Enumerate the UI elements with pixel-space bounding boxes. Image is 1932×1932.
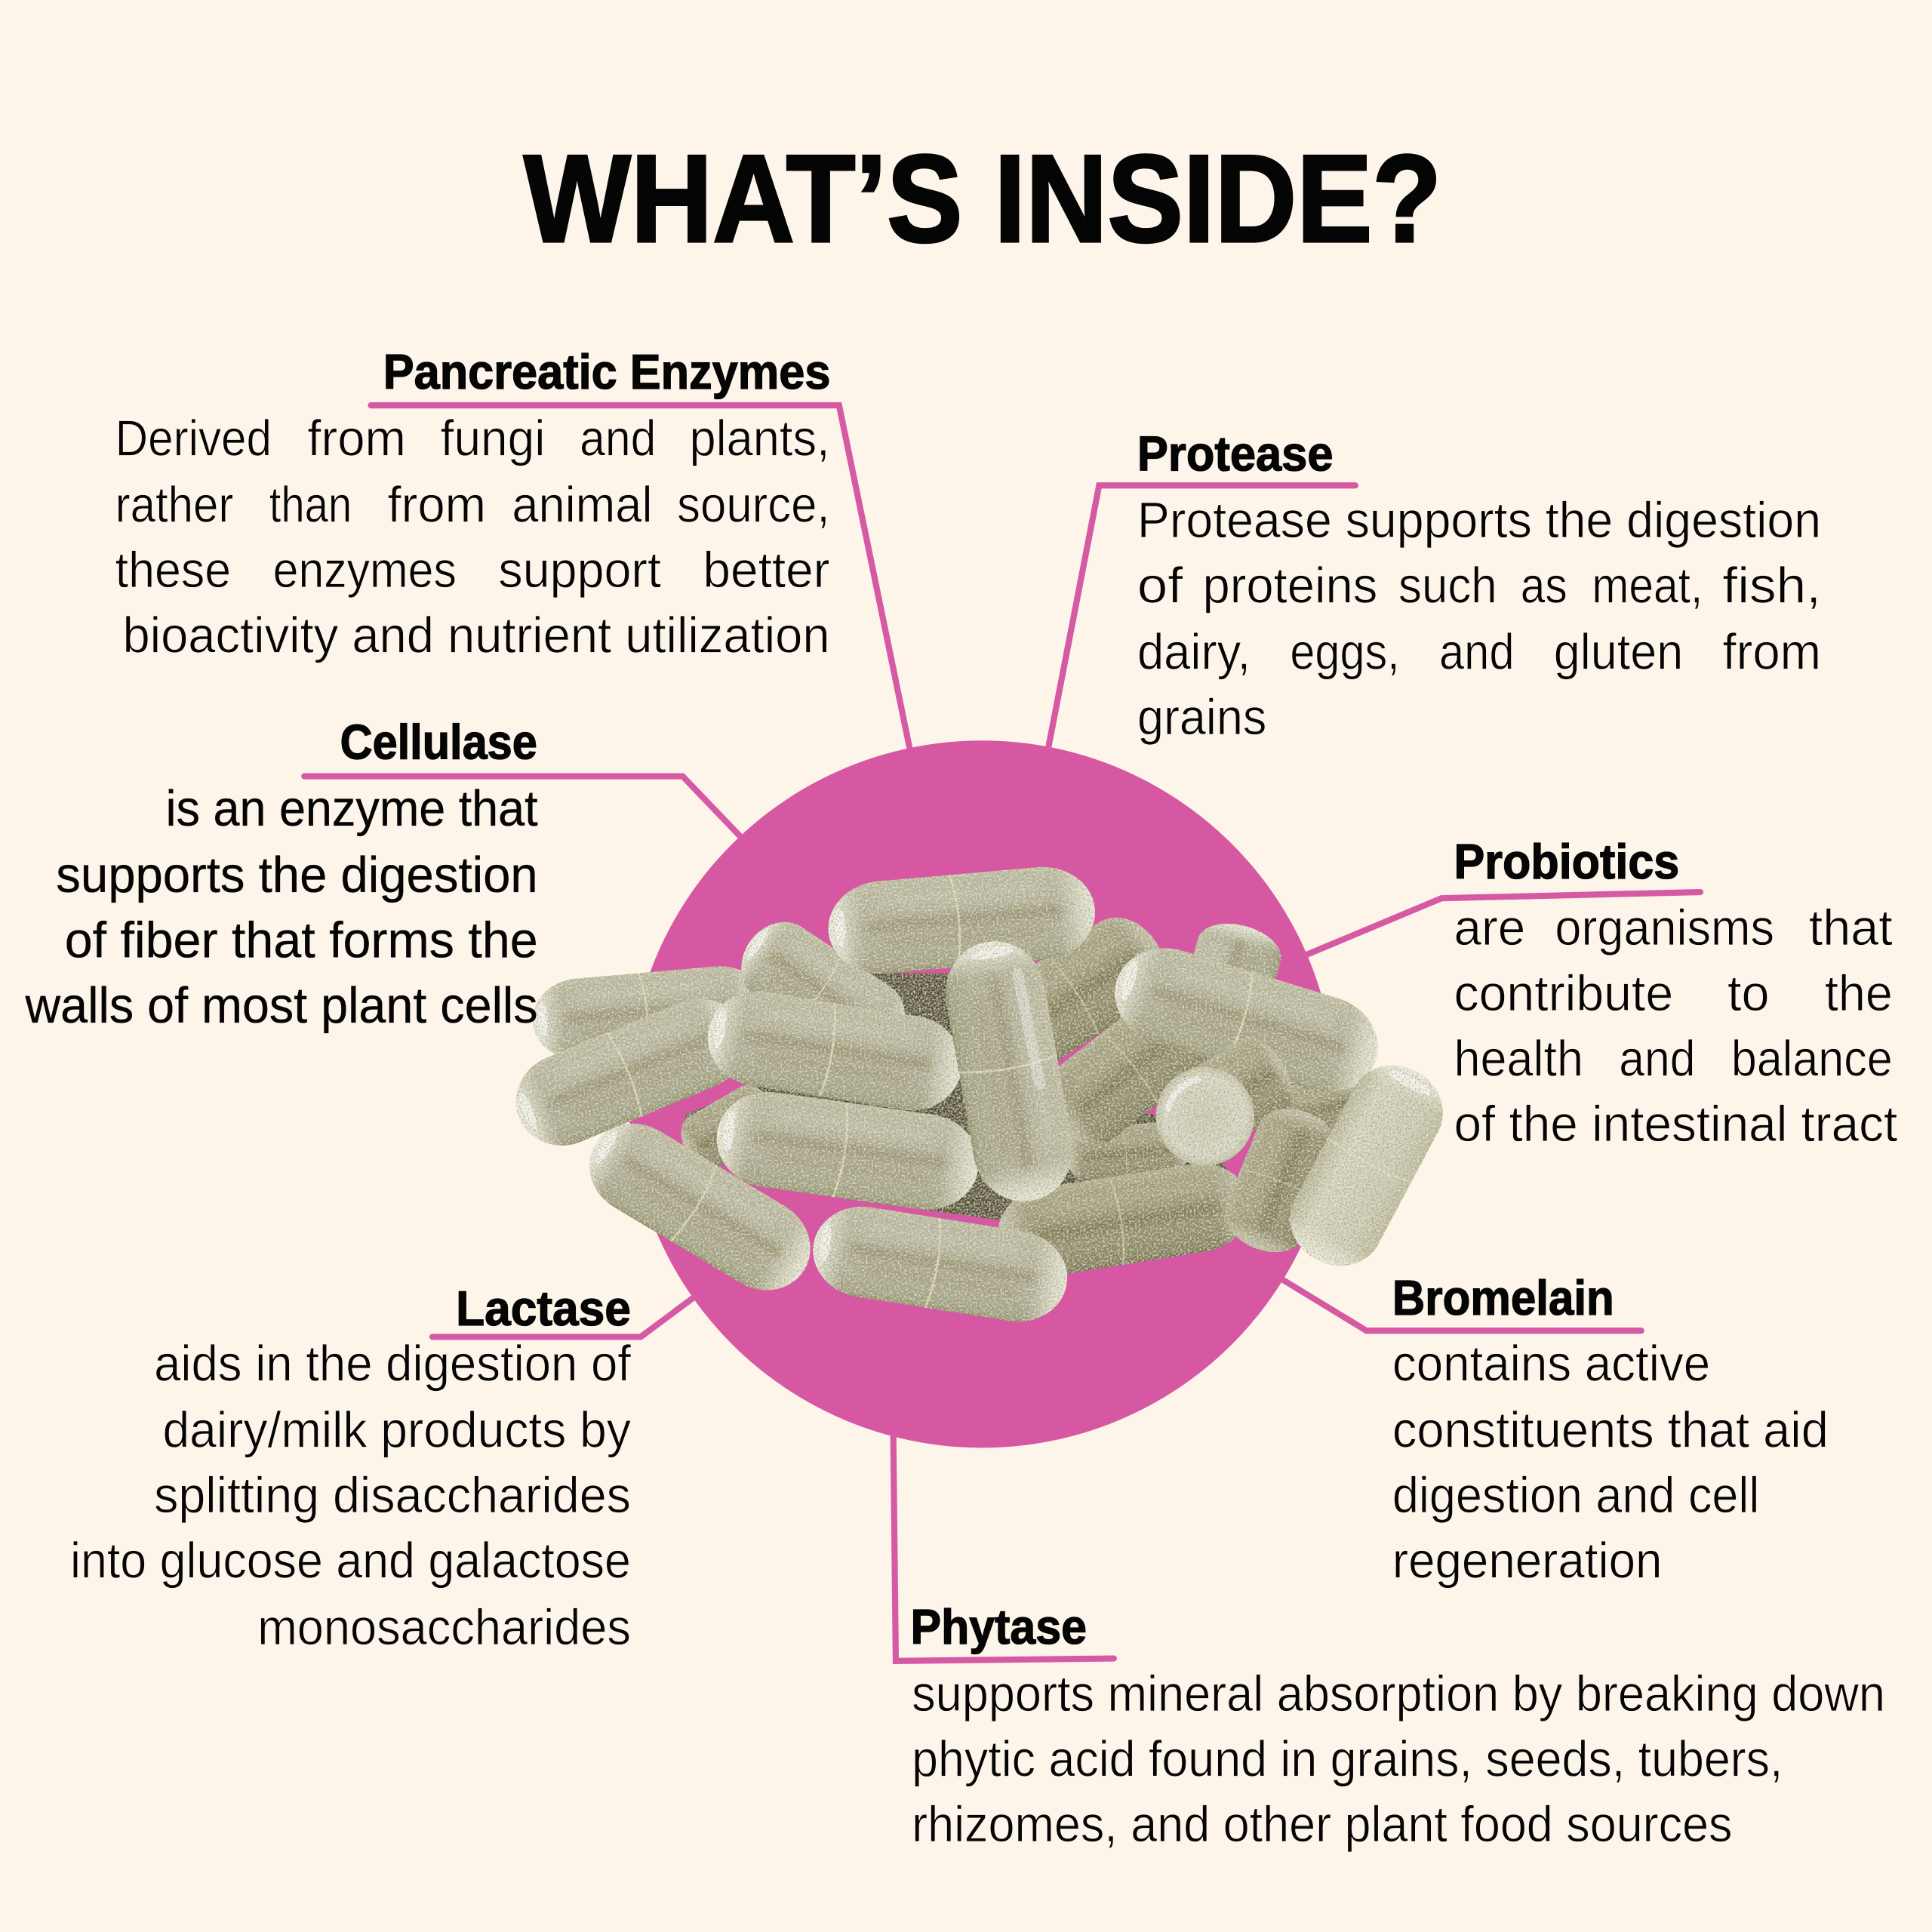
- text block: Bromelain description: digestion and cell: [1392, 1467, 1759, 1524]
- text block: Protease description: proteins: [1202, 557, 1377, 614]
- connector: Bromelain: [1281, 1279, 1641, 1331]
- heading: Protease: Protease: [1137, 426, 1334, 481]
- text block: Protease description: dairy,: [1137, 624, 1251, 681]
- text block: Cellulase description: supports the digestion: [56, 847, 538, 903]
- central pink circle: [629, 740, 1336, 1447]
- text block: Protease description: such: [1398, 557, 1497, 614]
- text block: Lactase description: [70, 1335, 631, 1656]
- text block: Probiotics description: of the intestinal tract: [1454, 1096, 1898, 1152]
- text block: Protease description: grains: [1137, 689, 1266, 746]
- text block: Pancreatic Enzymes description: better: [703, 542, 830, 598]
- connector: Protease: [1048, 485, 1355, 746]
- text block: Probiotics description: that: [1809, 900, 1893, 956]
- connector: Cellulase: [304, 777, 740, 835]
- text block: Protease description: meat,: [1592, 557, 1703, 614]
- text block: Phytase description: phytic acid found in grains, seeds, tubers,: [912, 1730, 1783, 1787]
- text block: Phytase description: supports mineral absorption by breaking down: [912, 1666, 1885, 1722]
- title: WHAT’S INSIDE?: [524, 129, 1441, 268]
- text block: Lactase description: dairy/milk products by: [163, 1402, 631, 1459]
- text block: Pancreatic Enzymes description: from: [387, 476, 486, 533]
- heading: Bromelain: Bromelain: [1392, 1270, 1614, 1325]
- text block: Protease description: of: [1137, 557, 1183, 614]
- text block: Pancreatic Enzymes description: than: [269, 476, 352, 533]
- connector: Phytase: [894, 1437, 1114, 1661]
- heading: Cellulase: Cellulase: [340, 715, 537, 770]
- text block: Pancreatic Enzymes description: bioactivity and nutrient utilization: [122, 607, 830, 663]
- text block: Pancreatic Enzymes description: support: [498, 542, 661, 598]
- text block: Cellulase description: [25, 780, 538, 1034]
- text block: Lactase description: into glucose and galactose: [70, 1533, 631, 1589]
- capsule pile image: [502, 863, 1458, 1329]
- heading: Lactase: Lactase: [456, 1281, 631, 1336]
- text block: Cellulase description: of fiber that forms the: [65, 912, 538, 969]
- text block: Pancreatic Enzymes description: animal: [512, 476, 652, 533]
- heading: Phytase: Phytase: [911, 1599, 1087, 1654]
- text block: Probiotics description: and: [1619, 1030, 1696, 1087]
- text block: Pancreatic Enzymes description: [115, 410, 830, 663]
- text block: Bromelain description: regeneration: [1392, 1533, 1662, 1589]
- text block: Pancreatic Enzymes description: and: [580, 410, 656, 466]
- text block: Protease description: from: [1722, 624, 1821, 681]
- text block: Protease description: gluten: [1554, 624, 1683, 681]
- text block: Cellulase description: walls of most plant cells: [25, 977, 538, 1034]
- text block: Probiotics description: contribute: [1454, 965, 1673, 1022]
- capsule: upright centre: [937, 934, 1081, 1209]
- text block: Probiotics description: to: [1727, 965, 1769, 1022]
- text block: Phytase description: rhizomes, and other plant food sources: [912, 1796, 1733, 1853]
- text block: Protease description: fish,: [1722, 557, 1821, 614]
- text block: Probiotics description: organisms: [1555, 900, 1774, 956]
- text block: Protease description: [1137, 492, 1821, 746]
- text block: Bromelain description: [1392, 1335, 1829, 1589]
- text block: Protease description: Protease supports the digestion: [1137, 492, 1821, 549]
- text block: Cellulase description: is an enzyme that: [166, 780, 538, 837]
- connector: Lactase: [432, 1297, 694, 1337]
- text block: Pancreatic Enzymes description: fungi: [441, 410, 545, 466]
- connector: Pancreatic Enzymes: [371, 405, 909, 746]
- text block: Pancreatic Enzymes description: these: [115, 542, 231, 598]
- connector: Probiotics: [1306, 892, 1700, 955]
- text block: Probiotics description: balance: [1731, 1030, 1893, 1087]
- text block: Protease description: eggs,: [1290, 624, 1400, 681]
- heading: Pancreatic Enzymes: Pancreatic Enzymes: [383, 344, 830, 399]
- text block: Phytase description: [912, 1666, 1885, 1853]
- text block: Pancreatic Enzymes description: plants,: [689, 410, 830, 466]
- text block: Probiotics description: are: [1454, 900, 1525, 956]
- text block: Pancreatic Enzymes description: Derived: [115, 410, 272, 466]
- text block: Pancreatic Enzymes description: enzymes: [273, 542, 457, 598]
- text block: Pancreatic Enzymes description: rather: [115, 476, 233, 533]
- text block: Probiotics description: health: [1454, 1030, 1583, 1087]
- heading: Probiotics: Probiotics: [1454, 834, 1679, 889]
- text block: Protease description: as: [1521, 557, 1567, 614]
- text block: Lactase description: aids in the digestion of: [154, 1335, 631, 1392]
- text block: Protease description: and: [1439, 624, 1515, 681]
- capsule: small end-on oval: [1155, 1029, 1304, 1165]
- text block: Probiotics description: the: [1825, 965, 1893, 1022]
- text block: Lactase description: monosaccharides: [257, 1599, 631, 1656]
- text block: Bromelain description: constituents that aid: [1392, 1402, 1829, 1459]
- text block: Lactase description: splitting disaccharides: [154, 1467, 631, 1524]
- text block: Bromelain description: contains active: [1392, 1335, 1710, 1392]
- text block: Probiotics description: [1454, 900, 1898, 1152]
- text block: Pancreatic Enzymes description: source,: [677, 476, 830, 533]
- text block: Pancreatic Enzymes description: from: [307, 410, 406, 466]
